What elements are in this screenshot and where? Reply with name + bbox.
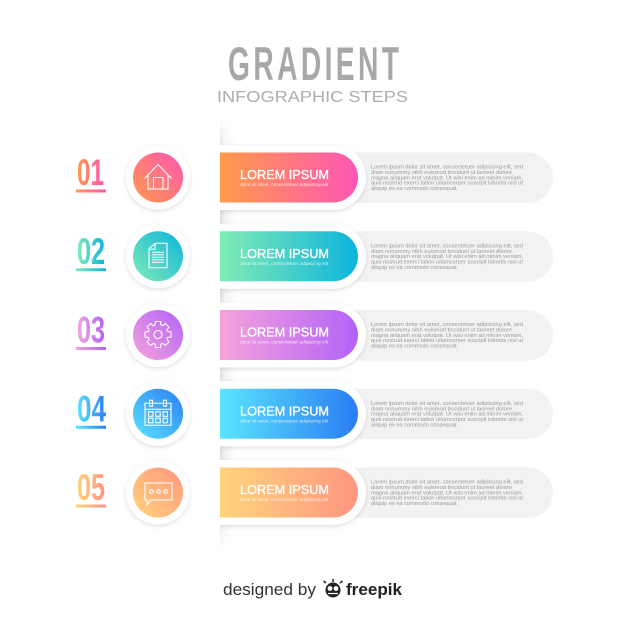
description pill 04: [330, 389, 553, 439]
description text 02: Lorem ipsum dolor sit amet, consectetuer adipiscing elit, sed: [371, 243, 523, 249]
step 04: [76, 381, 553, 446]
white pill 03: [220, 302, 366, 368]
description text 01: Lorem ipsum dolor sit amet, consectetuer adipiscing elit, sed: [371, 164, 523, 170]
description text 04: magna aliquam erat volutpat. Ut wisi enim ad minim veniam,: [371, 412, 523, 418]
description text 03: magna aliquam erat volutpat. Ut wisi enim ad minim veniam,: [371, 333, 523, 339]
description text 01: quis nostrud exerci tation ullamcorper suscipit lobortis nisl ut: [371, 181, 524, 187]
footer credit: [223, 579, 403, 599]
pill heading 03: LOREM IPSUM: [240, 324, 329, 340]
gradient pill 03: [220, 310, 358, 360]
white pill 02: [220, 224, 366, 289]
description text 05: Lorem ipsum dolor sit amet, consectetuer adipiscing elit, sed: [371, 480, 523, 486]
pill subtext 04: dolor sit amet, consectetuer adipiscing elit: [240, 418, 329, 423]
step 01: [76, 145, 553, 210]
description text 01: diam nonummy nibh euismod tincidunt ut laoreet dolore: [371, 170, 512, 176]
description text 01: magna aliquam erat volutpat. Ut wisi enim ad minim veniam,: [371, 175, 523, 181]
description text 04: quis nostrud exerci tation ullamcorper suscipit lobortis nisl ut: [371, 417, 524, 423]
circle badge 01: [126, 146, 190, 210]
description text 05: [371, 480, 524, 507]
description text 01: aliquip ex ea commodo consequat.: [371, 186, 458, 192]
description text 03: [371, 322, 524, 350]
description text 02: diam nonummy nibh euismod tincidunt ut laoreet dolore: [371, 249, 512, 255]
freepik wordmark: freepik: [346, 580, 403, 599]
white pill 01: [220, 145, 366, 210]
underline 03: [76, 347, 106, 350]
description text 05: aliquip ex ea commodo consequat.: [371, 501, 458, 507]
gradient pill 05: [220, 468, 358, 518]
number 03: 03: [77, 310, 105, 350]
step 03: [76, 302, 553, 368]
number 04: 04: [77, 388, 106, 429]
description text 05: quis nostrud exerci tation ullamcorper suscipit lobortis nisl ut: [371, 496, 524, 502]
pill heading 04: LOREM IPSUM: [240, 403, 329, 418]
description pill 05: [330, 468, 553, 518]
underline 02: [76, 268, 106, 271]
description text 02: quis nostrud exerci tation ullamcorper suscipit lobortis nisl ut: [371, 259, 524, 265]
description pill 03: [330, 310, 553, 360]
circle gradient 04: [133, 389, 183, 439]
circle gradient 02: [133, 231, 183, 281]
description pill 02: [330, 231, 553, 282]
step 05: [76, 460, 553, 525]
pill subtext 01: dolor sit amet, consectetuer adipiscing elit: [240, 182, 329, 187]
pill heading 05: LOREM IPSUM: [240, 482, 329, 497]
underline 04: [76, 426, 106, 429]
pill heading 02: LOREM IPSUM: [240, 246, 329, 261]
description pill 01: [330, 152, 553, 203]
white pill 05: [220, 460, 366, 525]
description text 03: quis nostrud exerci tation ullamcorper suscipit lobortis nisl ut: [371, 338, 524, 344]
icon: speech bubble: [145, 483, 172, 505]
circle badge 04: [126, 382, 190, 446]
vertical divider shadow: [220, 126, 228, 538]
description text 05: diam nonummy nibh euismod tincidunt ut laoreet dolore: [371, 485, 512, 491]
description text 04: aliquip ex ea commodo consequat.: [371, 422, 458, 428]
step 02: [76, 224, 553, 289]
description text 01: [371, 164, 524, 192]
circle gradient 03: [133, 310, 183, 360]
gradient pill 04: [220, 389, 358, 439]
underline 05: [76, 504, 106, 508]
description text 03: aliquip ex ea commodo consequat.: [371, 344, 458, 350]
subtitle: INFOGRAPHIC STEPS: [217, 89, 408, 106]
number 02: 02: [77, 231, 105, 272]
circle badge 05: [126, 460, 190, 524]
pill subtext 03: dolor sit amet, consectetuer adipiscing elit: [240, 340, 329, 344]
description text 03: Lorem ipsum dolor sit amet, consectetuer adipiscing elit, sed: [371, 322, 523, 328]
number 01: 01: [77, 152, 104, 193]
pill heading 01: LOREM IPSUM: [240, 167, 329, 182]
circle gradient 01: [133, 152, 183, 202]
description text 04: diam nonummy nibh euismod tincidunt ut laoreet dolore: [371, 406, 512, 412]
description text 04: Lorem ipsum dolor sit amet, consectetuer adipiscing elit, sed: [371, 401, 523, 407]
description text 05: magna aliquam erat volutpat. Ut wisi enim ad minim veniam,: [371, 490, 523, 496]
gradient pill 02: [220, 231, 358, 281]
icon: gear: [145, 322, 171, 348]
circle gradient 05: [133, 468, 183, 518]
description text 03: diam nonummy nibh euismod tincidunt ut laoreet dolore: [371, 328, 512, 334]
white pill 04: [220, 381, 366, 446]
number 05: 05: [77, 467, 105, 508]
icon: document: [149, 243, 167, 268]
pill subtext 05: dolor sit amet, consectetuer adipiscing elit: [240, 497, 329, 502]
description text 02: magna aliquam erat volutpat. Ut wisi enim ad minim veniam,: [371, 254, 523, 260]
gradient pill 01: [220, 152, 358, 202]
circle badge 03: [126, 303, 190, 367]
description text 02: [371, 243, 524, 271]
underline 01: [76, 190, 106, 192]
pill subtext 02: dolor sit amet, consectetuer adipiscing elit: [240, 261, 329, 266]
description text 04: [371, 401, 524, 428]
icon: house: [144, 164, 172, 189]
title: GRADIENT: [228, 39, 399, 91]
description text 02: aliquip ex ea commodo consequat.: [371, 265, 458, 271]
icon: calendar: [145, 400, 171, 425]
designed by label: designed by: [223, 581, 317, 599]
circle badge 02: [126, 224, 190, 288]
icon: freepik logo: [324, 579, 342, 598]
